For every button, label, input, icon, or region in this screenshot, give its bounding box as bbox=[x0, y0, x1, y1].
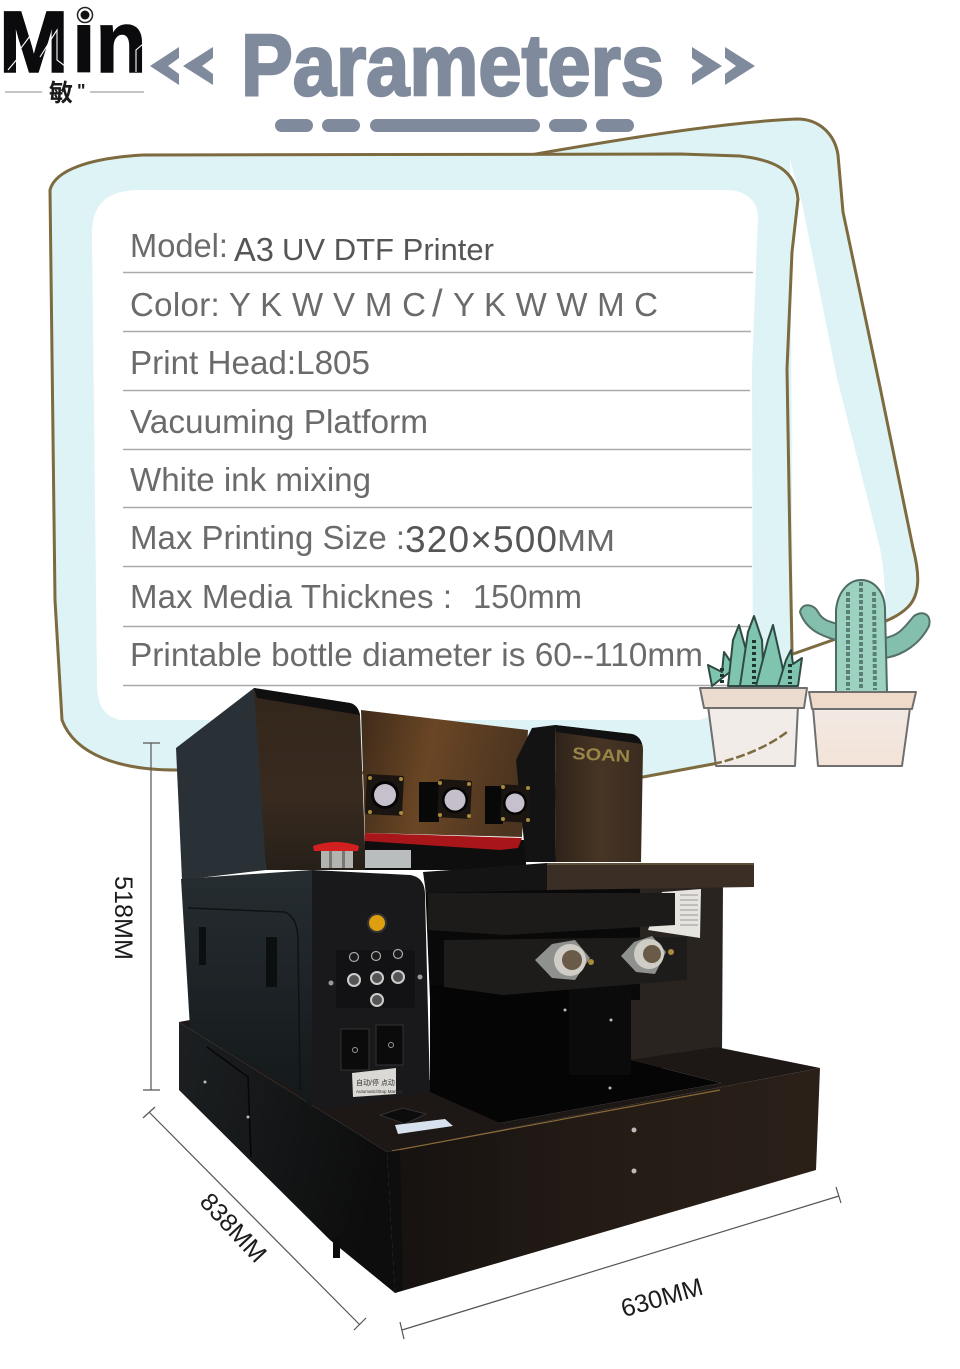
dimension: width 630MM: 630MM bbox=[618, 1273, 706, 1323]
printer: right housing bbox=[516, 725, 643, 862]
dimension: height 518MM bbox=[109, 743, 160, 1090]
logo: Min: 敏 bbox=[49, 80, 73, 107]
printer: carriage bbox=[428, 893, 675, 935]
logo: Min: " bbox=[77, 81, 86, 101]
row: printing size: Max Printing Size : bbox=[130, 519, 405, 556]
printer: yellow button bbox=[367, 913, 387, 933]
heading underline dashes bbox=[275, 119, 634, 132]
printer: emergency stop bbox=[313, 842, 359, 868]
icon: potted cactus bbox=[800, 580, 930, 766]
row: color: Color: Y K W V M C bbox=[130, 286, 426, 323]
printer: keypad bbox=[328, 950, 422, 1008]
dimension: height 518MM: 518MM bbox=[109, 876, 137, 960]
row: printing size: 320×500 bbox=[405, 519, 557, 560]
printer: fan 1 bbox=[365, 774, 404, 816]
row: white ink: White ink mixing bbox=[130, 461, 371, 498]
printer: SOAN brand: SOAN bbox=[572, 744, 631, 766]
row: color: / bbox=[432, 283, 443, 325]
row: bottle diameter: Printable bottle diameter is 60--110mm bbox=[130, 636, 703, 673]
heading: Parameters: Parameters bbox=[241, 17, 664, 114]
row: media thickness bbox=[123, 578, 752, 626]
printer: switch label bbox=[352, 1068, 403, 1097]
printer: rocker switches bbox=[341, 1025, 403, 1070]
printer: tower side bbox=[176, 688, 266, 880]
dimension: depth 838MM bbox=[143, 1107, 366, 1330]
printer: clamp right bbox=[621, 936, 674, 974]
printer: base front bbox=[387, 1068, 820, 1293]
printer: base top surface bbox=[179, 985, 820, 1152]
printer: fan 2 bbox=[419, 779, 472, 822]
printer: rear column and notice label bbox=[631, 885, 723, 1075]
printer: small base switch and label bbox=[380, 1108, 453, 1134]
printer: base details bbox=[204, 1047, 720, 1293]
printer: switch label: Automatic/Stop Manual bbox=[356, 1089, 403, 1094]
row: media thickness: Max Media Thicknes : bbox=[130, 578, 452, 615]
printer: lower tray bbox=[444, 937, 687, 995]
printer: base left side bbox=[179, 1022, 395, 1293]
printer: centre panel bbox=[361, 710, 528, 837]
row: model: A3 bbox=[234, 231, 274, 268]
row: color bbox=[123, 283, 751, 332]
printer: control cabinet front bbox=[312, 870, 430, 1110]
frame inner white area bbox=[92, 190, 758, 720]
row: print head: Print Head:L805 bbox=[130, 344, 370, 381]
row: printing size bbox=[123, 519, 752, 566]
icon: potted aloe bbox=[700, 616, 807, 766]
row: color: Y K W W M C bbox=[453, 286, 658, 323]
printer: print platform bbox=[423, 863, 754, 893]
printer: tower front bbox=[254, 688, 366, 870]
printer: switch label: 自动/停 点动 bbox=[356, 1078, 395, 1087]
dimension: width 630MM bbox=[400, 1187, 841, 1339]
row: model: Model: bbox=[130, 227, 228, 264]
printer: fan 3 bbox=[485, 784, 531, 824]
printer: chassis side cabinet bbox=[181, 870, 312, 1110]
row: media thickness: 150mm bbox=[473, 578, 582, 615]
front note frame bbox=[50, 154, 798, 777]
row: model bbox=[123, 227, 753, 272]
row: model: UV DTF Printer bbox=[282, 232, 494, 267]
printer: clamp left bbox=[535, 940, 594, 980]
printer: dark interior behind platform bbox=[425, 880, 640, 1000]
row: platform: Vacuuming Platform bbox=[130, 403, 428, 440]
printer: red strip bbox=[365, 833, 522, 850]
printer photo bbox=[176, 688, 820, 1293]
parameters list bbox=[123, 227, 753, 686]
printer: silver block bbox=[365, 850, 411, 868]
row: printing size: MM bbox=[557, 523, 615, 558]
printer: interior below panel bbox=[365, 838, 526, 870]
printer: cabinet door and handles bbox=[188, 908, 300, 1090]
back note frame bbox=[530, 119, 918, 654]
dimension: depth 838MM: 838MM bbox=[194, 1188, 272, 1268]
